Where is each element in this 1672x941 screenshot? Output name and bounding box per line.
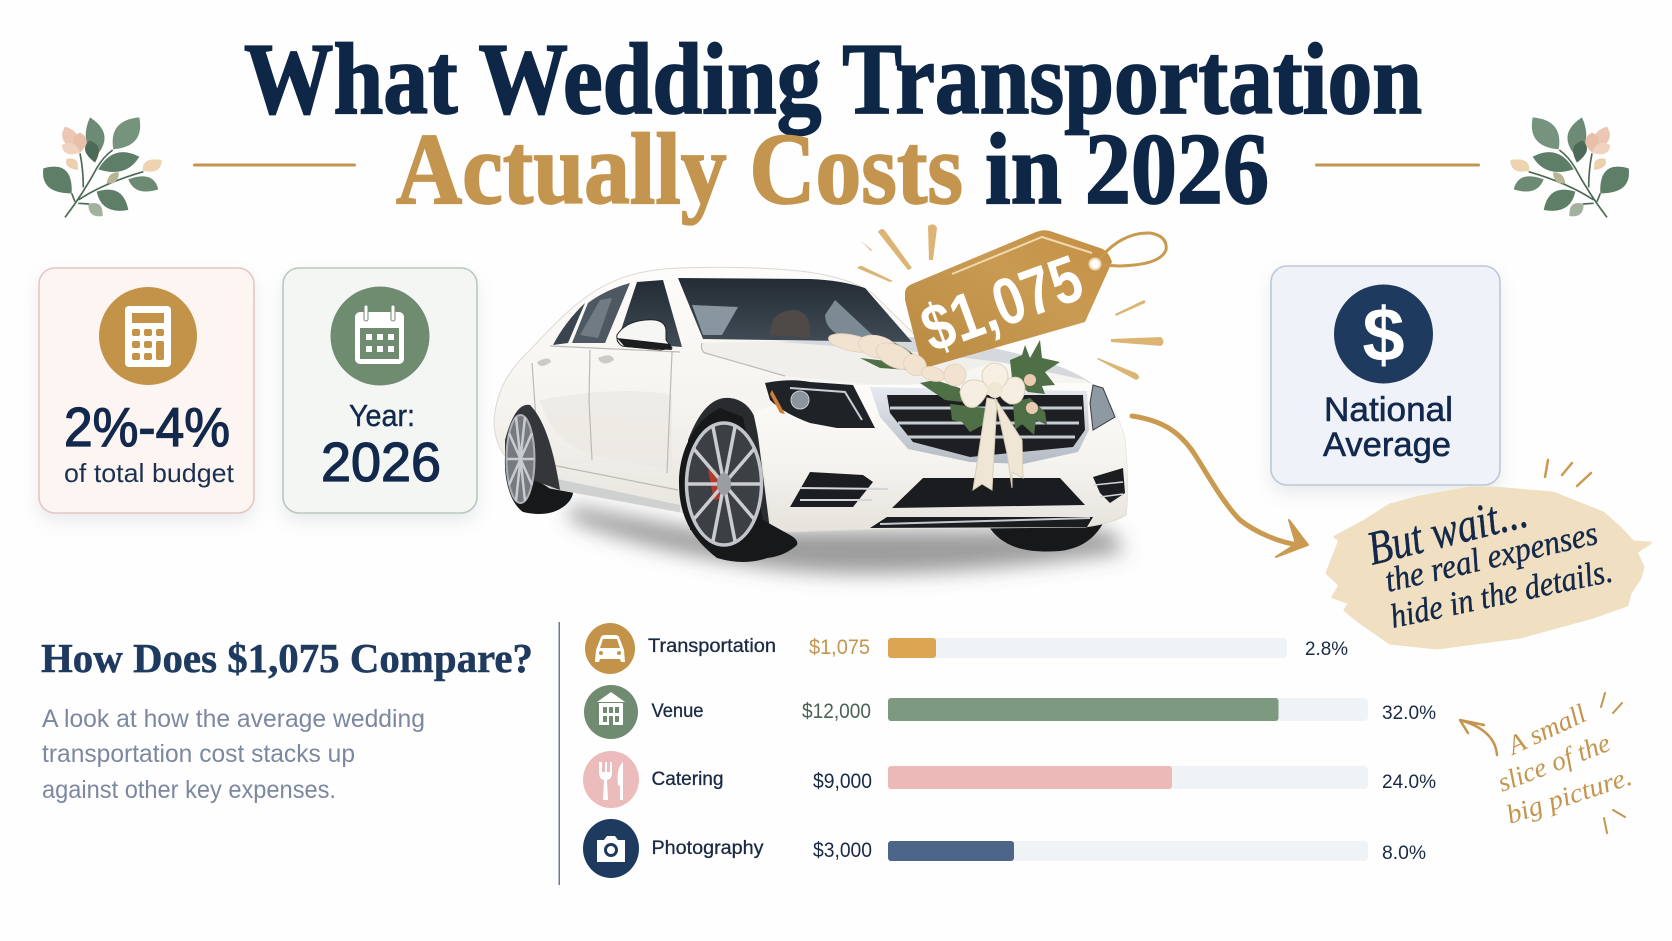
lower grille — [892, 478, 1085, 508]
callout text: the real expenses — [1381, 515, 1601, 600]
blush blooms — [1024, 374, 1036, 386]
row: photography: $3,000 — [813, 839, 872, 862]
far front tyre — [985, 520, 1105, 551]
callout — [1327, 485, 1650, 648]
front rim — [686, 423, 762, 545]
icon: floral sprig right — [1510, 117, 1629, 217]
title: What Wedding Transportation — [244, 23, 1422, 136]
small note: big picture. — [1503, 761, 1635, 830]
front tyre — [679, 408, 797, 562]
icon: camera — [583, 819, 639, 878]
mirror — [617, 320, 672, 350]
tag price: $1,075 — [911, 240, 1092, 366]
panel: national average: Average — [1323, 426, 1451, 464]
callout text — [1362, 485, 1616, 636]
divider — [558, 622, 560, 885]
year label: Year: — [349, 398, 415, 433]
rosette — [982, 363, 1008, 389]
row: catering — [583, 751, 1436, 808]
small note ticks — [1601, 693, 1625, 833]
floral garland and bow — [827, 330, 1060, 490]
ribbons — [973, 398, 997, 490]
wheel arches — [505, 405, 560, 490]
door handles — [537, 355, 614, 366]
quarter window — [553, 303, 585, 345]
splitter — [870, 517, 1093, 528]
icon: car — [585, 623, 635, 674]
left headlight — [765, 380, 875, 428]
icon: dollar — [1334, 284, 1433, 384]
row: transportation — [585, 623, 1348, 674]
row: venue: $12,000 — [802, 700, 871, 723]
bow loops — [960, 380, 990, 407]
rear tyre — [505, 405, 573, 514]
price burst rays — [857, 224, 1164, 380]
title: Actually Costs — [396, 113, 963, 226]
decorative rule left — [193, 164, 356, 166]
callout text: hide in the details. — [1387, 553, 1616, 636]
comparison description — [42, 705, 425, 804]
year value: 2026 — [321, 431, 441, 493]
small note: slice of the — [1493, 727, 1614, 798]
comparison description: transportation cost stacks up — [42, 740, 355, 768]
small note: A small — [1501, 698, 1591, 761]
row: transportation: $1,075 — [809, 636, 870, 659]
left fog vent — [790, 472, 873, 507]
car shadow — [570, 505, 1125, 574]
row: photography: 8.0% — [1382, 843, 1426, 864]
stat label: of total budget — [64, 458, 235, 488]
arrow: small note — [1460, 720, 1497, 755]
icon: catering — [583, 751, 639, 808]
title — [244, 23, 1422, 226]
row: photography — [583, 819, 1426, 878]
panel: budget share — [39, 268, 254, 513]
stat value: 2%-4% — [64, 396, 230, 458]
comparison description: A look at how the average wedding — [42, 705, 425, 733]
national average label: National — [1324, 391, 1453, 429]
right headlight — [1090, 385, 1115, 430]
greenery — [860, 340, 1060, 435]
panel: national average — [1271, 266, 1500, 485]
icon: venue — [584, 685, 638, 739]
front bumper — [753, 383, 1127, 531]
comparison heading: How Does $1,075 Compare? — [41, 635, 533, 681]
title: in 2026 — [985, 113, 1269, 226]
bar chart — [583, 623, 1436, 878]
right fog vent — [1093, 468, 1125, 503]
tag loop — [1096, 233, 1166, 266]
row: transportation: 2.8% — [1305, 639, 1348, 660]
row: venue — [584, 685, 1436, 739]
panel: year — [283, 268, 477, 513]
rear side window — [572, 283, 630, 343]
icon: calculator — [99, 287, 197, 385]
row: catering: $9,000 — [813, 770, 872, 793]
row: catering: 24.0% — [1382, 772, 1436, 793]
comparison description: against other key expenses. — [42, 776, 336, 804]
row: venue: Venue — [652, 701, 704, 722]
icon: floral sprig left — [43, 117, 162, 217]
icon: dollar: $ — [1362, 293, 1405, 378]
windshield — [678, 278, 912, 342]
grille — [870, 387, 1089, 464]
arrow: to callout — [1132, 416, 1308, 557]
car body — [494, 267, 1127, 532]
icon: calendar — [330, 286, 430, 386]
small note — [1493, 698, 1635, 830]
rear rim — [506, 415, 534, 503]
row: catering: Catering — [652, 769, 724, 790]
decorative rule right — [1315, 164, 1480, 166]
body shading — [540, 391, 672, 470]
row: venue: 32.0% — [1382, 703, 1436, 724]
price tag — [905, 230, 1166, 368]
row: transportation: Transportation — [648, 636, 776, 657]
car — [494, 267, 1127, 562]
garland — [827, 330, 966, 386]
callout ticks — [1545, 460, 1591, 486]
callout text: But wait... — [1362, 485, 1533, 576]
front side window — [617, 280, 682, 347]
row: photography: Photography — [652, 838, 764, 859]
door lines — [532, 343, 785, 490]
